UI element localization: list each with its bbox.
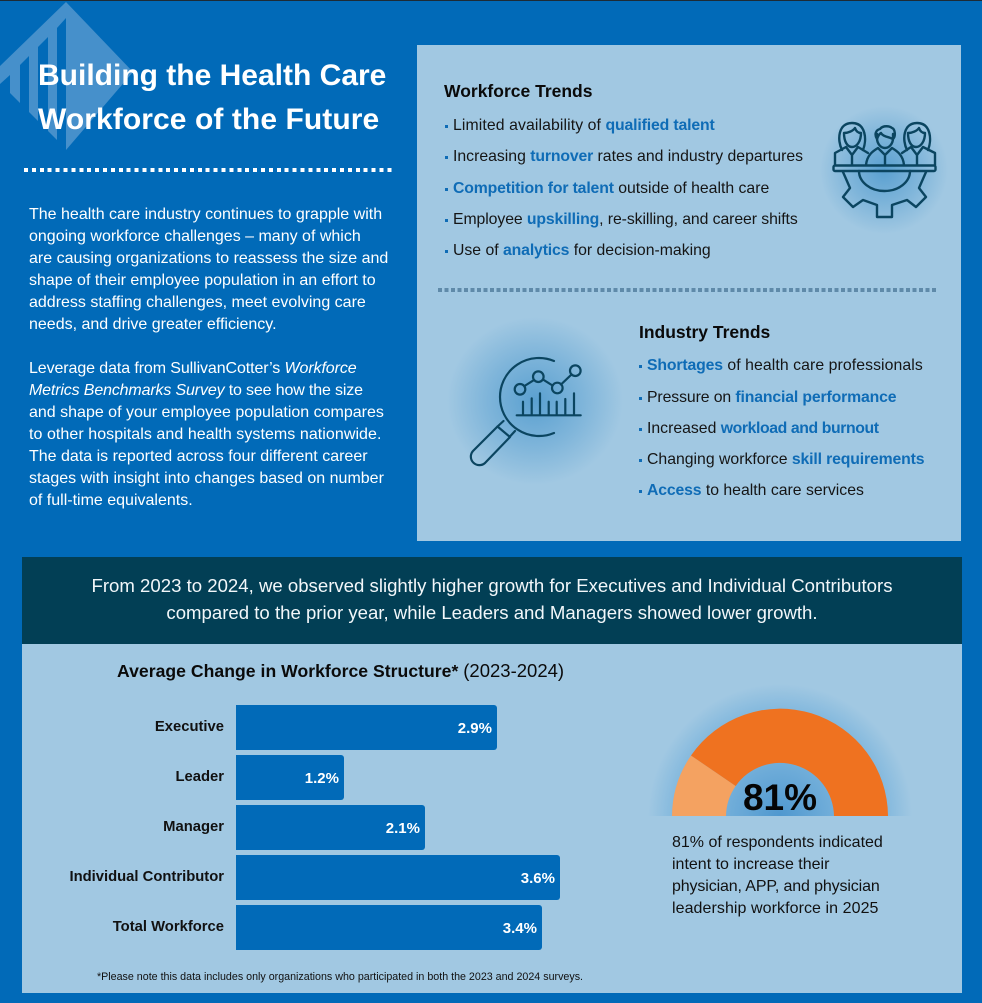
- list: industry trends: [639, 357, 924, 499]
- icon: magnifier over chart: [456, 326, 614, 476]
- panel: workforce trends: [444, 81, 941, 259]
- title: [38, 59, 386, 136]
- text block: gauge caption: intent to increase their: [672, 856, 829, 873]
- text block: intro: [29, 206, 388, 333]
- text block: survey description: The data is reported across four different career: [29, 448, 368, 465]
- list: industry trends: Changing workforce skill requirements: [647, 451, 924, 468]
- bar chart: Leader: [175, 769, 224, 785]
- list: workforce trends: Employee upskilling, re-skilling, and career shifts: [453, 211, 798, 228]
- panel: industry trends: [456, 322, 924, 499]
- list: industry trends: Pressure on financial performance: [647, 389, 896, 406]
- text block: intro: The health care industry continues to grapple with: [29, 206, 382, 223]
- text block: intro: are causing organizations to reassess the size and: [29, 250, 388, 267]
- text block: gauge caption: leadership workforce in 2025: [672, 900, 879, 917]
- top edge: [0, 0, 982, 1]
- list: industry trends: Increased workload and burnout: [647, 420, 879, 437]
- bar chart: 2.9%: [458, 720, 492, 737]
- gauge chart: 81%: [655, 691, 904, 818]
- icon: team on gear: [827, 113, 941, 227]
- text block: survey description: Metrics Benchmarks Survey to see how the size: [29, 382, 363, 399]
- title: Workforce of the Future: [38, 103, 379, 136]
- banner: key finding: From 2023 to 2024, we observed slightly higher growth for Executives and Individual Contributors: [92, 575, 892, 596]
- bar chart: 2.1%: [386, 820, 420, 837]
- banner: key finding: [22, 557, 962, 644]
- text block: intro: shape of their employee population in an effort to: [29, 272, 376, 289]
- heading: workforce trends: Workforce Trends: [444, 81, 592, 101]
- bar chart: 3.6%: [521, 870, 555, 887]
- bar chart: Executive: [155, 719, 224, 735]
- list: workforce trends: [445, 117, 803, 259]
- text block: survey description: [29, 360, 384, 509]
- list: industry trends: Shortages of health care professionals: [647, 357, 923, 374]
- list: workforce trends: Limited availability of qualified talent: [453, 117, 715, 134]
- banner: key finding: compared to the prior year, while Leaders and Managers showed lower growth.: [166, 602, 818, 623]
- text block: survey description: Leverage data from SullivanCotter’s Workforce: [29, 360, 357, 377]
- text block: survey description: of full-time equivalents.: [29, 492, 193, 509]
- panel: trends: [417, 45, 961, 541]
- footnote: *Please note this data includes only organizations who participated in both the 2023 and 2024 surveys.: [97, 971, 583, 983]
- list: industry trends: Access to health care services: [647, 482, 864, 499]
- text block: gauge caption: 81% of respondents indicated: [672, 834, 883, 851]
- text block: intro: address staffing challenges, meet evolving care: [29, 294, 366, 311]
- title: Building the Health Care: [38, 59, 386, 92]
- icon: watermark logo: [0, 2, 132, 150]
- text block: gauge caption: physician, APP, and physician: [672, 878, 880, 895]
- text block: survey description: to other hospitals and health systems nationwide.: [29, 426, 381, 443]
- chart heading: Average Change in Workforce Structure* (2023-2024): [117, 660, 564, 681]
- text block: gauge caption: [672, 834, 883, 917]
- heading: industry trends: Industry Trends: [639, 322, 770, 342]
- text block: intro: ongoing workforce challenges – many of which: [29, 228, 361, 245]
- list: workforce trends: Use of analytics for decision-making: [453, 242, 711, 259]
- text block: survey description: stages with insight into changes based on number: [29, 470, 384, 487]
- text block: survey description: and shape of your employee population compares: [29, 404, 384, 421]
- bar chart: 1.2%: [305, 770, 339, 787]
- panel: data: [22, 644, 962, 993]
- bar chart: Individual Contributor: [69, 869, 224, 885]
- bar chart: 3.4%: [503, 920, 537, 937]
- list: workforce trends: Competition for talent outside of health care: [453, 180, 769, 197]
- list: workforce trends: Increasing turnover rates and industry departures: [453, 148, 803, 165]
- gauge chart: 81%: 81%: [743, 777, 817, 818]
- text block: intro: needs, and drive greater efficiency.: [29, 316, 277, 333]
- bar chart: Total Workforce: [113, 919, 224, 935]
- bar chart: Manager: [163, 819, 224, 835]
- bar chart: [69, 705, 560, 950]
